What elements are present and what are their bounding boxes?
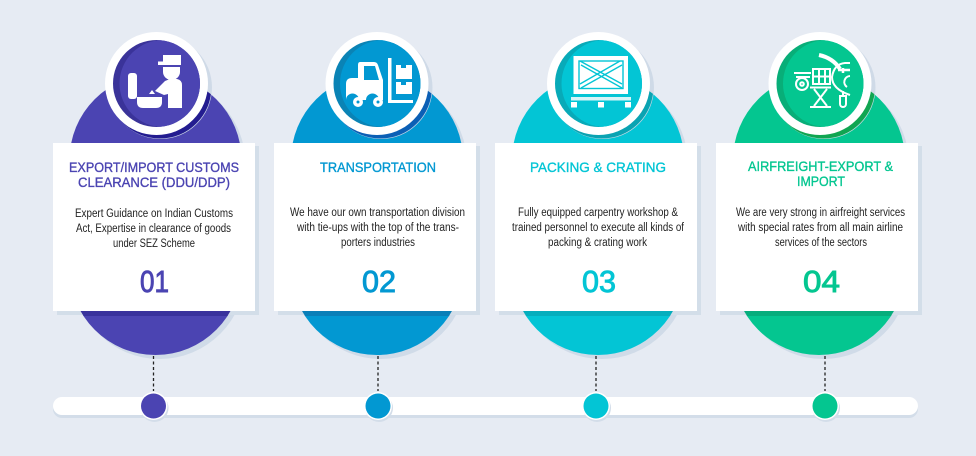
- timeline bar: [53, 397, 918, 418]
- icon badge: customs officer: [105, 32, 212, 139]
- description: airfreight: [736, 207, 905, 249]
- heading: airfreight: AIRFREIGHT-EXPORT &: [748, 158, 894, 174]
- timeline marker 1: [140, 356, 168, 422]
- panel: airfreight: [716, 32, 922, 359]
- timeline marker 3: [582, 356, 611, 422]
- heading: customs: [69, 159, 239, 190]
- backing shape: transportation: [291, 74, 467, 359]
- number 02: 02: [362, 264, 396, 299]
- icon badge: crate: [547, 32, 654, 139]
- description: airfreight: We are very strong in airfreight services: [736, 207, 905, 219]
- panel: transportation: [274, 32, 480, 359]
- description: transportation: [290, 207, 465, 249]
- heading: packing: PACKING & CRATING: [530, 159, 666, 175]
- description: customs: Expert Guidance on Indian Customs: [75, 208, 233, 220]
- heading: airfreight: [748, 158, 894, 189]
- icon: forklift: [346, 58, 413, 107]
- heading: customs: EXPORT/IMPORT CUSTOMS: [69, 159, 239, 175]
- backing shape: airfreight: [733, 74, 909, 359]
- number 04: 04: [803, 264, 840, 299]
- card: customs: [53, 143, 259, 316]
- description: packing: Fully equipped carpentry workshop &: [518, 207, 678, 219]
- description: transportation: We have our own transportation division: [290, 207, 465, 219]
- heading: customs: CLEARANCE (DDU/DDP): [78, 174, 230, 190]
- card: packing: [495, 143, 701, 316]
- timeline marker 4: [811, 356, 840, 422]
- description: airfreight: with special rates from all main airline: [737, 222, 903, 234]
- description: packing: packing & crating work: [548, 237, 647, 249]
- description: airfreight: services of the sectors: [775, 237, 867, 249]
- number 03: 03: [582, 264, 616, 299]
- icon badge: forklift: [326, 32, 432, 139]
- panel: customs clearance: [53, 32, 259, 359]
- number 01: 01: [140, 264, 169, 299]
- timeline marker 2: [364, 356, 393, 422]
- heading: transportation: TRANSPORTATION: [320, 159, 436, 175]
- description: customs: [75, 208, 233, 250]
- card: transportation: [274, 143, 480, 316]
- backing shape: packing: [512, 74, 688, 359]
- panel: packing and crating: [495, 32, 701, 359]
- icon badge: air cargo: [768, 32, 876, 139]
- description: customs: Act, Expertise in clearance of goods: [76, 223, 231, 235]
- description: customs: under SEZ Scheme: [113, 238, 195, 250]
- description: transportation: with tie-ups with the top of the trans-: [296, 222, 459, 234]
- description: packing: [512, 207, 685, 249]
- icon: wooden crate on pallet: [571, 56, 631, 108]
- description: transportation: porters industries: [341, 237, 415, 249]
- icon: plane loading with scissor lift: [794, 55, 850, 107]
- icon: officer at toilet: [128, 55, 182, 108]
- heading: airfreight: IMPORT: [797, 173, 845, 189]
- description: packing: trained personnel to execute all kinds of: [512, 222, 685, 234]
- card: airfreight: [716, 143, 922, 316]
- backing shape: customs: [70, 74, 246, 359]
